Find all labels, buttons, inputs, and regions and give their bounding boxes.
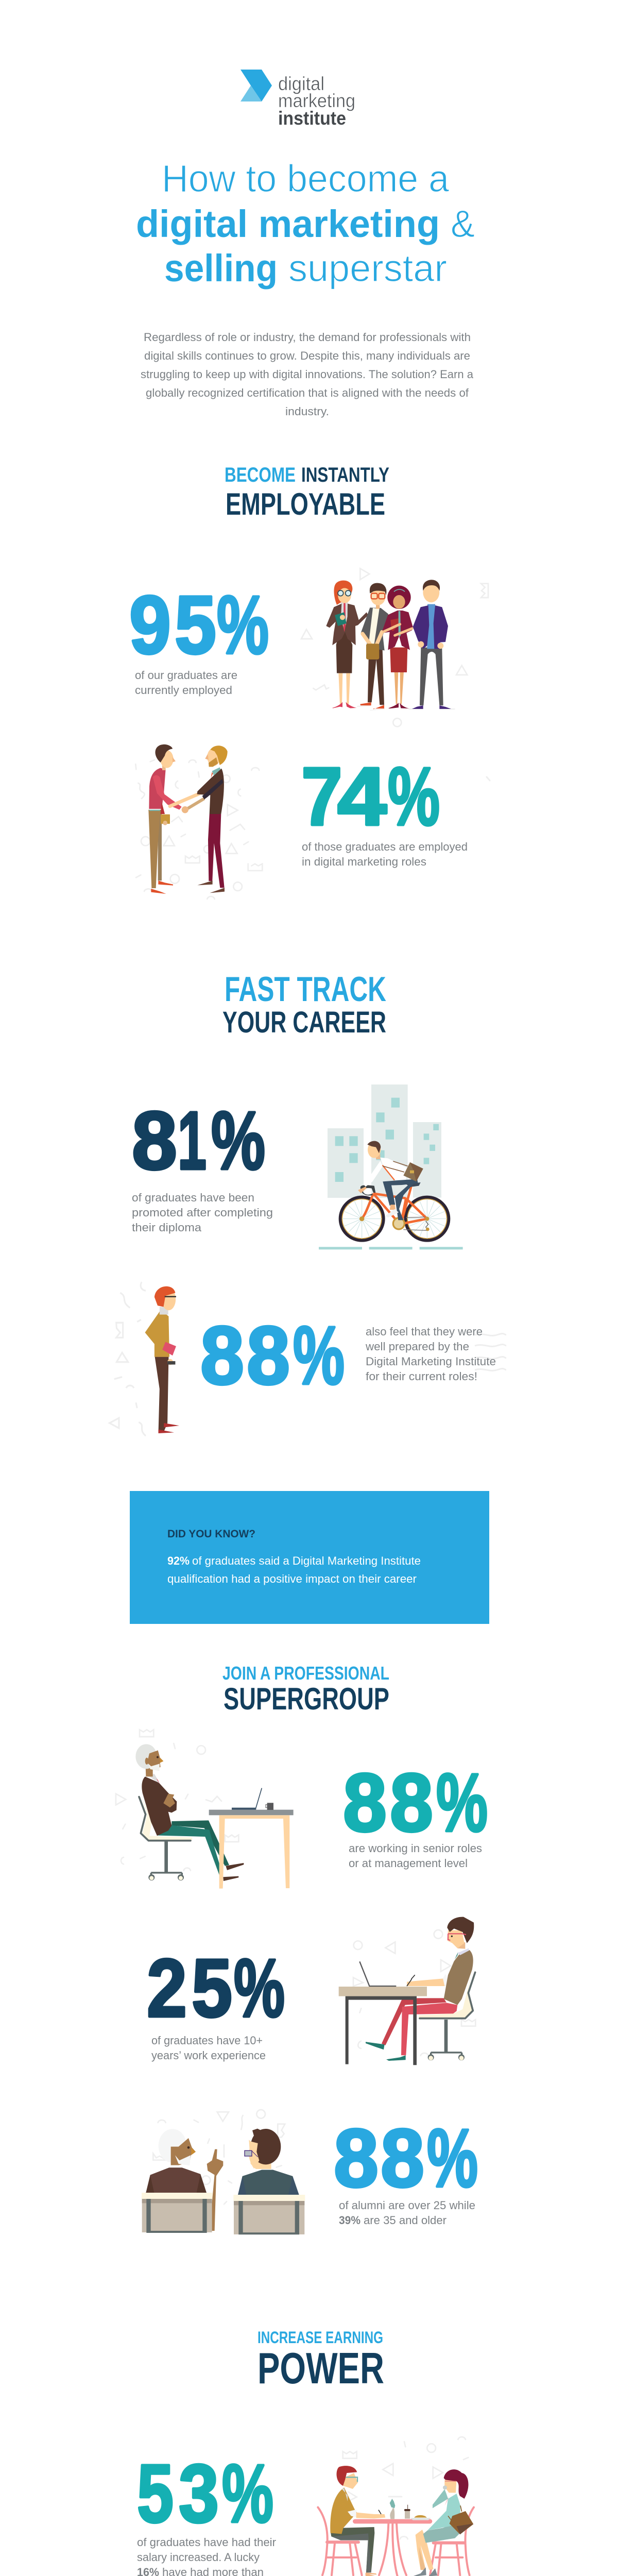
heading: increase earning power [258, 2328, 384, 2393]
stat: 95%: 5 [175, 579, 216, 671]
stat: 25%: 2 [147, 1942, 187, 2034]
illustration: senior man at desk [116, 1730, 294, 1889]
stat: 95% [129, 579, 269, 671]
person: man in red sweater [148, 744, 182, 894]
desk and laptop [339, 1961, 427, 2065]
stat text: 95%: of our graduates are [135, 669, 237, 682]
stat: 74% [301, 750, 440, 842]
illustration: man with red hair and book [110, 1282, 179, 1436]
heading: become instantly employable: BECOME [225, 464, 296, 486]
illustration: couple at cafe table [318, 2437, 474, 2576]
rider [358, 1141, 423, 1220]
stat: 88% prepared [200, 1309, 345, 1401]
heading: fast track your career: FAST TRACK [225, 970, 386, 1009]
stat text: 88% prepared: Digital Marketing Institute [366, 1355, 496, 1368]
title: How to become a [162, 157, 450, 200]
intro paragraph [141, 331, 474, 418]
cafe chairs and table [318, 2507, 474, 2576]
heading: join a professional supergroup [222, 1663, 389, 1716]
man with dark hair [238, 2129, 299, 2195]
stat: 53%: 3 [179, 2447, 219, 2539]
stat: 74%: 7 [301, 750, 342, 842]
illustration: handshake [135, 744, 262, 899]
intro paragraph: Regardless of role or industry, the demand for professionals with [144, 331, 471, 344]
stat text: 88% alumni: of alumni are over 25 while [339, 2199, 475, 2212]
title: selling [164, 247, 278, 290]
office chair [419, 1972, 475, 2060]
woman with ponytail and satchel [411, 2469, 473, 2576]
stat text: 25%: years’ work experience [151, 2049, 266, 2062]
stat text: 25%: of graduates have 10+ [151, 2034, 263, 2047]
stat text: 53% [137, 2536, 276, 2576]
stat: 88% prepared: 8 [200, 1309, 244, 1401]
stat text: 74%: of those graduates are employed [302, 840, 468, 853]
title: & [451, 202, 475, 245]
stat text: 95%: currently employed [135, 684, 232, 697]
title: superstar [288, 247, 447, 290]
man in mustard sweater [330, 2466, 385, 2576]
stat: 25%: 5 [192, 1942, 232, 2034]
illustration: young man at laptop [339, 1917, 475, 2065]
intro paragraph: industry. [285, 405, 329, 418]
bicycle [340, 1182, 449, 1241]
stat: 25% [147, 1942, 285, 2034]
desk, laptop and mug [209, 1788, 294, 1889]
road lines [319, 1247, 463, 1249]
heading: increase earning power: INCREASE EARNING [258, 2328, 383, 2347]
stat: 74%: % [388, 750, 440, 842]
stat text: 95% [135, 669, 237, 697]
title [136, 157, 475, 290]
stat: 88% senior roles: % [436, 1756, 488, 1849]
stat text: 88% alumni: are 35 and older [364, 2214, 447, 2227]
intro paragraph: struggling to keep up with digital innovations. The solution? Earn a [141, 368, 474, 381]
stat text: 53%: salary increased. A lucky [137, 2551, 260, 2564]
stat text: 88% prepared: for their current roles! [366, 1370, 477, 1383]
person: man in purple blazer [412, 580, 451, 709]
heading: become instantly employable [225, 464, 389, 521]
illustration: cyclist in the city [319, 1084, 463, 1249]
stat text: 81%: of graduates have been [132, 1191, 254, 1204]
red trousers and shoes [366, 1998, 457, 2061]
stat text: 88% prepared: well prepared by the [365, 1340, 469, 1353]
stat: 74%: 4 [337, 750, 387, 842]
stat: 95%: 9 [129, 579, 171, 671]
heading: join a professional supergroup: SUPERGROUP [224, 1682, 389, 1716]
logo: digital [278, 73, 324, 94]
stat text: 74% [302, 840, 468, 868]
stat: 81%: 8 [132, 1094, 177, 1187]
callout: did you know: DID YOU KNOW? [167, 1528, 255, 1540]
office chair [139, 1794, 192, 1880]
logo [241, 70, 355, 129]
intro paragraph: globally recognized certification that is aligned with the needs of [146, 386, 469, 399]
illustration: two men talking [142, 2110, 305, 2234]
stat: 25%: % [234, 1942, 285, 2034]
section: become instantly employable [129, 464, 490, 899]
chair back right [233, 2195, 305, 2234]
man with white hair [146, 2129, 223, 2231]
stat text: 74%: in digital marketing roles [302, 855, 426, 868]
stat: 81% [132, 1094, 265, 1187]
intro paragraph: digital skills continues to grow. Despite this, many individuals are [144, 349, 470, 362]
title: digital marketing [136, 202, 440, 245]
items on the table [390, 2499, 431, 2520]
stat text: 81%: promoted after completing [132, 1206, 273, 1219]
man torso and head [407, 1917, 474, 2005]
logo: marketing [278, 90, 355, 111]
stat: 88% prepared: 8 [247, 1309, 290, 1401]
stat: 88% alumni: % [427, 2112, 478, 2204]
stat text: 81%: their diploma [132, 1221, 202, 1234]
stat: 88% senior roles: 8 [390, 1756, 433, 1849]
illustration: group of four professionals [301, 568, 488, 726]
callout: did you know: 92% [167, 1554, 190, 1567]
stat text: 88% alumni [339, 2199, 475, 2227]
heading: fast track your career [222, 970, 386, 1039]
stat text: 88% senior roles: or at management level [349, 1857, 468, 1870]
stat: 53%: % [222, 2447, 273, 2539]
callout: did you know: of graduates said a Digital Marketing Institute [192, 1554, 421, 1567]
section: join a professional supergroup [116, 1663, 488, 2234]
stat: 53% [137, 2447, 273, 2539]
person: man with glasses and bag [360, 583, 388, 709]
stat: 88% alumni: 8 [334, 2112, 379, 2204]
stat: 81%: 1 [178, 1094, 207, 1187]
stat: 53%: 5 [137, 2447, 174, 2539]
callout: did you know: qualification had a positive impact on their career [167, 1572, 417, 1585]
stat text: 53%: of graduates have had their [137, 2536, 276, 2549]
person: woman with afro [383, 586, 413, 708]
stat text: 88% alumni: 39% [339, 2214, 360, 2227]
stat text: 88% senior roles: are working in senior roles [349, 1842, 482, 1855]
heading: join a professional supergroup: JOIN A PROFESSIONAL [222, 1663, 389, 1684]
stat text: 88% senior roles [349, 1842, 482, 1870]
person: woman with red hair [326, 581, 368, 708]
stat: 88% prepared: % [293, 1309, 345, 1401]
heading: fast track your career: YOUR CAREER [222, 1006, 386, 1039]
section: increase earning power [93, 2328, 477, 2576]
stat text: 25% [151, 2034, 266, 2062]
stat: 88% alumni [334, 2112, 478, 2204]
stat: 95%: % [217, 579, 269, 671]
stat text: 88% prepared: also feel that they were [366, 1325, 483, 1338]
heading: become instantly employable: INSTANTLY [301, 464, 389, 486]
person: bearded man in brown jacket [170, 745, 228, 893]
stat: 81%: % [211, 1094, 265, 1187]
stat: 88% senior roles: 8 [343, 1756, 387, 1849]
senior man torso and head [135, 1744, 177, 1836]
stat: 88% senior roles [343, 1756, 488, 1849]
callout: did you know [130, 1491, 489, 1624]
heading: increase earning power: POWER [258, 2344, 384, 2393]
stat: 88% alumni: 8 [381, 2112, 424, 2204]
chair back left [142, 2193, 212, 2233]
logo: institute [278, 108, 346, 129]
heading: become instantly employable: EMPLOYABLE [226, 487, 385, 521]
section: fast track your career [110, 970, 506, 1624]
stat text: 81% [132, 1191, 273, 1234]
stat text: 88% prepared [365, 1325, 506, 1383]
legs and shoes [158, 1820, 244, 1881]
